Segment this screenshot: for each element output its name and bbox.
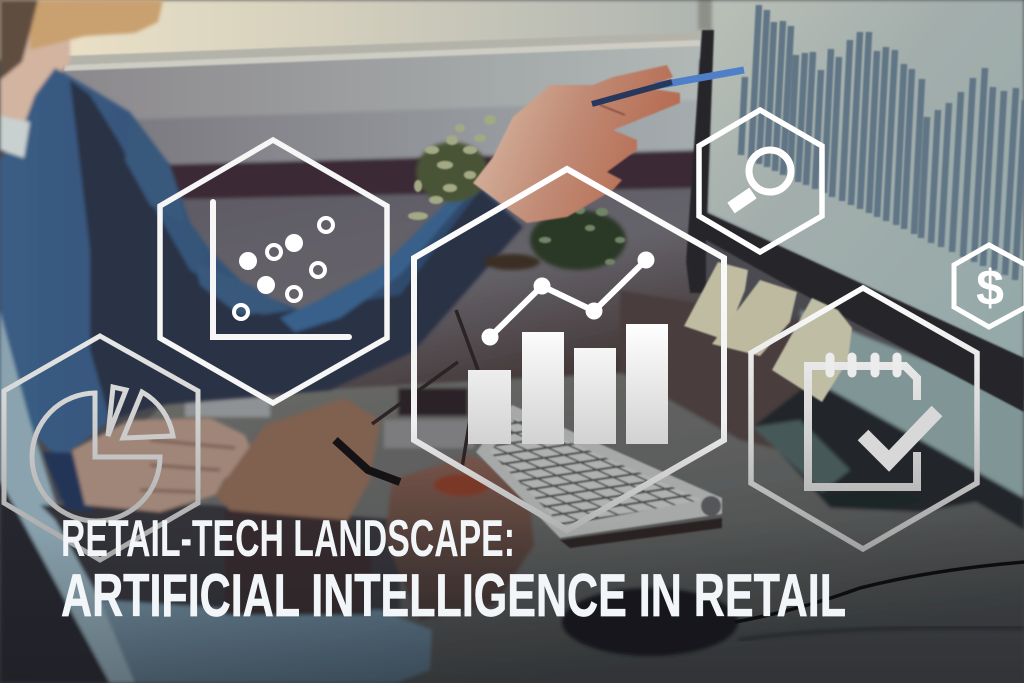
window frame lines xyxy=(64,32,700,71)
finger lines xyxy=(140,440,235,492)
mouse cable xyxy=(735,562,1024,622)
right hand xyxy=(385,455,534,620)
finger shadow xyxy=(600,105,625,115)
right pie slice xyxy=(123,392,173,438)
teal wall under bezel xyxy=(800,310,1024,498)
sweater dark side xyxy=(70,80,523,420)
light desk edge behind hand xyxy=(185,397,270,417)
pen xyxy=(592,70,744,104)
glasses xyxy=(335,310,478,482)
beard xyxy=(0,0,38,80)
calendar page xyxy=(808,366,917,487)
cuff dark blue xyxy=(42,452,92,512)
neck xyxy=(0,20,70,125)
plant lower leaves xyxy=(530,210,626,270)
mouse xyxy=(562,588,738,656)
face xyxy=(30,0,163,50)
shirt sleeve xyxy=(100,600,432,683)
desk lower left light xyxy=(384,420,474,448)
trend line xyxy=(490,260,646,337)
shirt collar xyxy=(0,116,30,158)
calendar rings xyxy=(830,357,897,373)
lower figure: sleeve and hands xyxy=(0,310,534,683)
monitor stand shadow xyxy=(755,380,1024,530)
elbow folds xyxy=(195,262,290,315)
hexagon frame xyxy=(4,336,198,560)
dark fade at bottom xyxy=(0,520,1024,683)
battery cylinder xyxy=(701,496,721,516)
dollar sign: $ xyxy=(976,260,1004,316)
sticky notes xyxy=(684,262,852,402)
hexagon frame xyxy=(699,110,822,252)
left hand xyxy=(72,418,256,512)
hexagon frame xyxy=(160,140,387,403)
key grid xyxy=(490,418,702,526)
dark under title xyxy=(40,505,400,610)
forearm highlight xyxy=(280,177,480,332)
icon: scatter plot hexagon xyxy=(160,140,387,403)
icon: calendar checklist hexagon xyxy=(751,288,977,549)
sticky note 3 xyxy=(772,298,852,402)
upper wall xyxy=(60,40,700,130)
keyboard body xyxy=(476,405,722,538)
icon: magnifier hexagon xyxy=(699,110,822,252)
dark lower left xyxy=(0,480,110,683)
dark shelf band xyxy=(150,150,700,202)
title line 1: RETAIL-TECH LANDSCAPE: xyxy=(61,510,515,568)
icon: main bar and line chart hexagon xyxy=(414,169,724,530)
man figure xyxy=(0,0,523,460)
hand shadow xyxy=(225,510,372,615)
check mark xyxy=(863,411,937,461)
stand sheen xyxy=(753,420,850,492)
bars xyxy=(468,324,668,444)
dark item on desk xyxy=(398,388,468,416)
desk surface xyxy=(0,370,1024,683)
filled points xyxy=(239,234,303,294)
hexagon frame xyxy=(954,245,1024,327)
magnifier lens xyxy=(749,150,791,192)
title xyxy=(61,510,846,629)
shadow under arm xyxy=(484,254,540,270)
raised hand xyxy=(473,65,680,223)
keyboard xyxy=(476,405,722,548)
red knuckles xyxy=(434,474,490,496)
frame top of monitor xyxy=(698,0,712,30)
narrow pie slice xyxy=(108,387,126,436)
chart axes xyxy=(213,202,349,337)
plant upper leaves xyxy=(408,115,626,270)
hexagon frame xyxy=(751,288,977,549)
monitor foot xyxy=(824,492,920,508)
hexagon frame xyxy=(414,169,724,530)
sweater xyxy=(0,68,523,460)
window xyxy=(0,0,710,60)
sweater lit arm xyxy=(125,118,186,225)
large pie slice xyxy=(32,393,160,521)
brown wall under monitor xyxy=(620,290,860,470)
icon: pie chart hexagon xyxy=(4,336,198,560)
magnifier handle xyxy=(731,193,753,208)
sticky note 1 xyxy=(684,262,748,340)
icon: dollar hexagon xyxy=(954,245,1024,327)
chart bars on monitor xyxy=(741,5,1024,280)
mid wall xyxy=(60,100,700,170)
monitor screen xyxy=(707,0,1024,360)
hollow points xyxy=(234,218,333,319)
trend points xyxy=(482,252,654,346)
lower wall xyxy=(150,188,700,400)
monitor bezel xyxy=(686,30,1024,412)
centre hand xyxy=(215,398,380,540)
bright shirt cuff left xyxy=(0,310,135,683)
keyboard shadow xyxy=(560,518,722,548)
sticky note 2 xyxy=(712,280,797,356)
cable shadow xyxy=(738,628,1024,640)
